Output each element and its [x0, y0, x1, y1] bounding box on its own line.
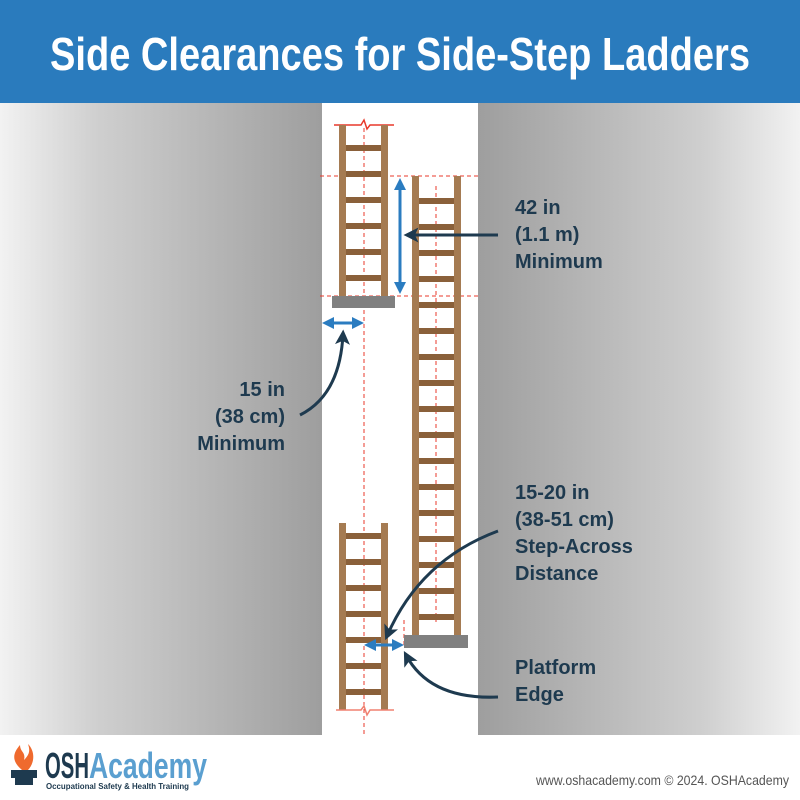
logo: Academy	[89, 745, 207, 786]
label: 42 in: Minimum	[515, 251, 603, 273]
logo: OSH	[45, 745, 89, 786]
label: step-across: Step-Across	[515, 536, 633, 558]
arrow: 15 in horizontal	[328, 322, 358, 324]
logo: Occupational Safety & Health Training	[46, 782, 189, 791]
right wall	[478, 103, 800, 735]
label: 15 in: 15 in	[239, 379, 285, 401]
callout arrow 42 in	[408, 234, 498, 236]
icon: torch	[11, 744, 37, 785]
label: platform edge: Edge	[515, 684, 564, 706]
guide lines	[320, 128, 480, 735]
upper ladder	[332, 120, 395, 308]
callout arrow platform edge	[406, 655, 498, 697]
header banner	[0, 0, 800, 103]
label: 42 in: (1.1 m)	[515, 224, 579, 246]
label: step-across: Distance	[515, 563, 598, 585]
platform upper	[332, 296, 395, 308]
callout arrow 15 in	[300, 334, 343, 415]
label: 15 in: Minimum	[197, 433, 285, 455]
label: 42 in: 42 in	[515, 197, 561, 219]
arrow: 42 in vertical	[398, 184, 402, 288]
label: step-across: (38-51 cm)	[515, 509, 614, 531]
tall ladder	[404, 176, 468, 648]
platform edge	[404, 635, 468, 648]
callout arrow step-across	[387, 531, 498, 636]
arrow: step-across horizontal	[370, 644, 398, 646]
left wall	[0, 103, 322, 735]
label: step-across: 15-20 in	[515, 482, 589, 504]
lower ladder	[336, 523, 394, 715]
label: 15 in: (38 cm)	[215, 406, 285, 428]
logo	[11, 744, 207, 791]
label: platform edge: Platform	[515, 657, 596, 679]
